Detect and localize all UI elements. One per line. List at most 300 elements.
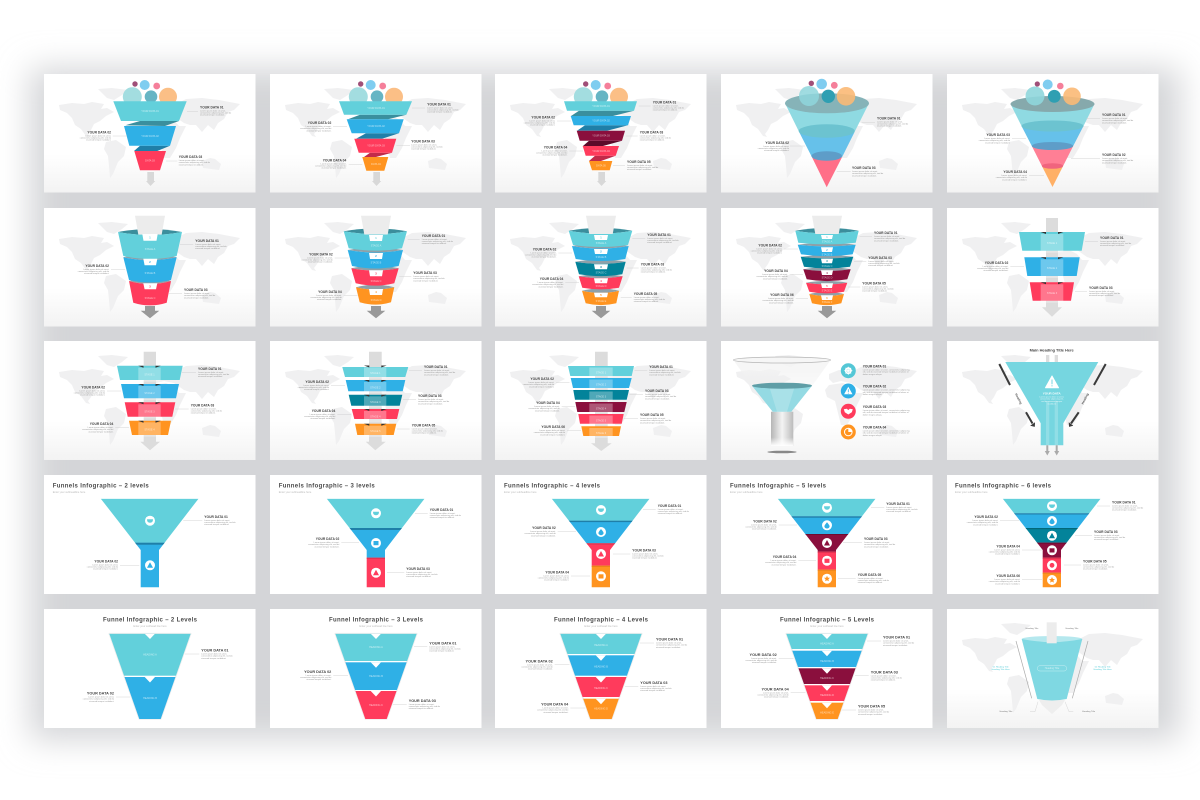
ribbon funnel xyxy=(339,101,412,171)
label 04: YOUR DATA 04 xyxy=(318,290,342,294)
funnel xyxy=(781,634,873,719)
label 04: YOUR DATA 04 xyxy=(323,158,346,162)
icon: drop xyxy=(1047,516,1057,526)
label 04: YOUR DATA 04 xyxy=(544,145,567,149)
label 03: eiusmod tempor incididunt. xyxy=(632,557,658,560)
label 01: eiusmod tempor incididunt. xyxy=(201,657,227,660)
label 06: eiusmod tempor incididunt. xyxy=(769,301,794,304)
label 05: consectetur adipiscing elit, sed do xyxy=(627,166,659,169)
cup funnel: Heading Title xyxy=(1045,667,1060,670)
label 04: consectetur adipiscing elit, sed do xyxy=(82,428,114,431)
funnel: HEADING A xyxy=(369,646,383,649)
label 04: eiusmod tempor incididunt. xyxy=(764,696,789,699)
funnel segments: STAGE 2 xyxy=(370,386,381,390)
label 04: Lorem ipsum dolor sit amet, xyxy=(542,149,568,152)
label 01: YOUR DATA 01 xyxy=(886,502,910,506)
label 03: consectetur adipiscing elit, sed do xyxy=(191,410,223,413)
stage bands xyxy=(795,216,859,305)
arrow xyxy=(367,306,385,318)
label 03: YOUR DATA 03 xyxy=(406,567,430,571)
label 01: YOUR DATA 01 xyxy=(649,365,673,369)
subtitle: Enter your subhead line here xyxy=(359,624,393,628)
funnel segments: STAGE 1 xyxy=(596,372,607,374)
stage bands: 2 xyxy=(375,254,377,258)
label 02: YOUR DATA 02 xyxy=(308,121,331,125)
icon: person xyxy=(371,568,381,578)
flow strips and output arrows xyxy=(1045,401,1059,456)
label 04: consectetur adipiscing elit, sed do xyxy=(765,561,797,564)
label 01: eiusmod tempor incididunt. xyxy=(1112,509,1137,512)
icon: gear xyxy=(841,363,856,378)
label 03: dolore magna aliqua. xyxy=(863,413,883,416)
teal note left: 01 Heading Title xyxy=(993,666,1009,668)
center text: Lorem ipsum dolor sit amet, xyxy=(1039,395,1064,398)
icon: mail xyxy=(371,538,381,548)
arrow xyxy=(372,172,381,186)
arrow xyxy=(592,306,610,318)
stage bands: 4 xyxy=(375,290,377,294)
funnel: HEADING B xyxy=(369,675,383,678)
label 01: eiusmod tempor incididunt. xyxy=(658,512,683,515)
label 03: YOUR DATA 03 xyxy=(871,670,898,674)
stage bands: 3 xyxy=(600,265,602,269)
label 01: YOUR DATA 01 xyxy=(201,649,228,653)
funnel xyxy=(1005,362,1098,445)
label 01: eiusmod tempor incididunt. xyxy=(883,644,908,647)
stage bands: STAGE E xyxy=(822,290,833,292)
label 03: YOUR DATA 03 xyxy=(413,271,437,275)
label 01: elit, sed do eiusmod tempor incididunt ut labore et xyxy=(863,371,909,374)
panel: slide 1 three level ribbon funnel xyxy=(44,74,256,192)
label 02: YOUR DATA 02 xyxy=(974,515,998,519)
label 02: YOUR DATA 02 xyxy=(758,243,782,247)
label 06: YOUR DATA 06 xyxy=(770,293,794,297)
label 01: Lorem ipsum dolor sit amet, xyxy=(201,653,227,656)
ribbon funnel: YOUR DATA 02 xyxy=(367,125,385,128)
label 01: consectetur adipiscing elit, sed do xyxy=(886,508,918,511)
label 02: Lorem ipsum dolor sit amet, xyxy=(303,384,329,387)
label 04: consectetur adipiscing elit, sed do xyxy=(315,165,347,168)
panel: slide 22 funnel 3 levels xyxy=(270,609,482,728)
label 05: eiusmod tempor incididunt. xyxy=(858,713,883,716)
funnel: HEADING D xyxy=(594,708,608,711)
label 03: Lorem ipsum dolor sit amet, xyxy=(1102,157,1128,160)
label 04: eiusmod tempor incididunt. xyxy=(543,711,569,714)
stage bands: 3 xyxy=(149,284,151,288)
label 02: eiusmod tempor incididunt. xyxy=(304,388,329,391)
stage bands: 1 xyxy=(600,236,602,240)
icon: pie chart xyxy=(841,424,856,440)
label 03: consectetur adipiscing elit, sed do xyxy=(1102,159,1134,162)
label 03: eiusmod tempor incididunt. xyxy=(409,707,434,710)
label 03: eiusmod tempor incididunt. xyxy=(1102,161,1127,164)
label 03: YOUR DATA 03 xyxy=(863,405,886,409)
label 04: Lorem ipsum dolor sit amet, xyxy=(1001,174,1027,177)
label 05: YOUR DATA 05 xyxy=(412,423,435,427)
arrow xyxy=(597,172,606,186)
icon: bowl xyxy=(1047,501,1057,511)
label 02: eiusmod tempor incididunt. xyxy=(529,385,554,388)
label 02: Lorem ipsum dolor sit amet, xyxy=(85,134,111,137)
label 04: YOUR DATA 04 xyxy=(762,687,789,691)
funnel: HEADING A xyxy=(820,643,834,646)
label 02: consectetur adipiscing elit, sed do xyxy=(78,270,110,273)
label 06: Lorem ipsum dolor sit amet, xyxy=(539,429,565,432)
funnel segments: STAGE 3 xyxy=(596,396,607,398)
label 03: consectetur adipiscing elit, sed do xyxy=(411,146,443,149)
label 02: Lorem ipsum dolor sit amet, xyxy=(751,523,777,526)
stage bands: 4 xyxy=(826,272,828,275)
panel: slide 6 three stage band funnel xyxy=(44,208,256,326)
left heading: Heading xyxy=(1014,393,1023,405)
label 02: YOUR DATA 02 xyxy=(305,380,329,384)
label 02: consectetur adipiscing elit, sed do xyxy=(301,259,334,262)
panel: slide 2 four level ribbon funnel xyxy=(270,74,482,192)
label 03: consectetur adipiscing elit, sed do xyxy=(640,687,672,690)
label 03: YOUR DATA 03 xyxy=(645,389,669,393)
heading top left: Heading Title xyxy=(1026,627,1039,630)
funnel segments: STAGE 5 xyxy=(370,430,381,433)
label 02: Lorem ipsum dolor sit amet, consectetur adipiscing xyxy=(863,389,910,392)
funnel xyxy=(555,634,647,719)
teal note left: Heading Title Here xyxy=(992,668,1011,671)
label 03: eiusmod tempor incididunt. xyxy=(179,163,204,166)
bubbles xyxy=(574,80,628,106)
label 02: YOUR DATA 02 xyxy=(753,519,777,523)
label 05: eiusmod tempor incididunt. xyxy=(1083,568,1108,571)
label 04: eiusmod tempor incididunt. xyxy=(317,298,342,301)
label 02: consectetur adipiscing elit, sed do xyxy=(298,386,330,389)
label 05: Lorem ipsum dolor sit amet, xyxy=(627,164,653,167)
label 03: Lorem ipsum dolor sit amet, xyxy=(411,143,437,146)
funnel xyxy=(330,634,422,719)
label 02: Lorem ipsum dolor sit amet, xyxy=(88,696,114,699)
subtitle: Enter your subhead line here xyxy=(810,624,844,628)
label 03: eiusmod tempor incididunt. xyxy=(411,148,437,151)
label 02: eiusmod tempor incididunt. xyxy=(973,523,998,526)
label 02: Lorem ipsum dolor sit amet, xyxy=(306,125,332,128)
funnel: HEADING C xyxy=(820,677,834,680)
label 02: eiusmod tempor incididunt. xyxy=(93,568,118,571)
icon: handshake xyxy=(841,404,856,419)
label 03: Lorem ipsum dolor sit amet, xyxy=(191,407,217,410)
funnel xyxy=(100,498,198,588)
panel: slide 14 glass funnel with icon list xyxy=(721,341,932,460)
label 03: Lorem ipsum dolor sit amet, xyxy=(852,170,878,173)
panel: slide 10 three level tube funnel xyxy=(947,208,1158,326)
label 02: Lorem ipsum dolor sit amet, xyxy=(756,247,782,250)
label 02: Lorem ipsum dolor sit amet, xyxy=(751,657,777,660)
label 01: YOUR DATA 01 xyxy=(653,100,676,104)
label 02: eiusmod tempor incididunt. xyxy=(306,129,332,132)
icon: flower xyxy=(1047,560,1057,570)
stage bands: 5 xyxy=(600,293,602,297)
label 01: consectetur adipiscing elit, sed do xyxy=(424,371,456,374)
label 03: eiusmod tempor incididunt. xyxy=(641,271,666,274)
arrow xyxy=(141,306,159,318)
panel: slide 23 funnel 4 levels xyxy=(495,609,706,728)
panel: slide 21 funnel 2 levels xyxy=(44,609,256,728)
funnel segments: STAGE 5 xyxy=(596,420,607,422)
label 02: eiusmod tempor incididunt. xyxy=(306,678,332,681)
label 06: Lorem ipsum dolor sit amet, xyxy=(994,578,1020,581)
label 03: YOUR DATA 03 xyxy=(864,537,888,541)
label 05: YOUR DATA 05 xyxy=(634,292,657,296)
label 01: consectetur adipiscing elit, sed do xyxy=(201,655,233,658)
label 01: consectetur adipiscing elit, sed do xyxy=(195,245,227,248)
label 01: eiusmod tempor incididunt. xyxy=(430,516,455,519)
panel: slide 4 translucent cone xyxy=(721,74,932,192)
label 01: YOUR DATA 01 xyxy=(883,636,910,640)
label 03: YOUR DATA 03 xyxy=(184,288,208,292)
label 01: consectetur adipiscing elit, sed do xyxy=(656,644,688,647)
label 03: consectetur adipiscing elit, sed do xyxy=(1089,292,1121,295)
label 02: YOUR DATA 02 xyxy=(304,670,331,674)
label 02: YOUR DATA 02 xyxy=(530,377,554,381)
label 01: consectetur adipiscing elit, sed do xyxy=(653,106,685,109)
subtitle: Enter your subheadline here xyxy=(955,490,988,494)
label 01: consectetur adipiscing elit, sed do xyxy=(658,510,690,513)
label 01: YOUR DATA 01 xyxy=(424,365,448,369)
label 01: eiusmod tempor incididunt. xyxy=(198,375,223,378)
label 01: YOUR DATA 01 xyxy=(1100,236,1124,240)
stage bands: STAGE C xyxy=(596,271,607,274)
label 01: YOUR DATA 01 xyxy=(429,641,456,645)
label 01: Lorem ipsum dolor sit amet, xyxy=(422,238,448,241)
label 04: elit, sed do eiusmod tempor incididunt ut labore et xyxy=(863,432,909,435)
label 03: YOUR DATA 03 xyxy=(418,394,442,398)
label 03: eiusmod tempor incididunt. xyxy=(871,679,896,682)
label 03: YOUR DATA 03 xyxy=(868,256,892,260)
label 05: consectetur adipiscing elit, sed do xyxy=(412,430,444,433)
label 02: consectetur adipiscing elit, sed do xyxy=(745,526,778,529)
title: Funnels Infographic – 4 levels xyxy=(504,484,601,490)
tube and arrow xyxy=(366,352,386,450)
icon: star xyxy=(1047,575,1057,585)
label 06: consectetur adipiscing elit, sed do xyxy=(762,299,795,302)
label 05: eiusmod tempor incididunt. xyxy=(862,290,888,293)
label 01: Lorem ipsum dolor sit amet, xyxy=(1112,504,1138,507)
label 01: eiusmod tempor incididunt. xyxy=(656,646,681,649)
side lines xyxy=(1016,641,1088,698)
funnel segments: STAGE 3 xyxy=(370,401,381,404)
stage bands: STAGE D xyxy=(822,276,833,280)
label 03: consectetur adipiscing elit, sed do xyxy=(645,395,677,398)
label 05: consectetur adipiscing elit, sed do xyxy=(862,288,894,291)
panel: slide 16 funnels 2 levels xyxy=(44,475,256,594)
label 03: consectetur adipiscing elit, sed do xyxy=(640,137,672,140)
label 01: YOUR DATA 01 xyxy=(1112,500,1136,504)
arrow xyxy=(146,172,155,186)
label 04: consectetur adipiscing elit, sed do xyxy=(304,415,336,418)
stage bands: STAGE F xyxy=(822,301,833,304)
label 04: eiusmod tempor incididunt. xyxy=(995,553,1020,556)
right pointer xyxy=(1069,364,1106,426)
label 03: eiusmod tempor incididunt. xyxy=(191,412,216,415)
label 02: Lorem ipsum dolor sit amet, xyxy=(531,251,557,254)
label 02: consectetur adipiscing elit, sed do xyxy=(745,659,778,662)
subtitle: Enter your subheadline here xyxy=(730,490,763,494)
label 02: consectetur adipiscing elit, sed do xyxy=(300,676,332,679)
label 02: eiusmod tempor incididunt. xyxy=(764,149,789,152)
label 01: eiusmod tempor incididunt. xyxy=(886,510,912,513)
label 05: YOUR DATA 05 xyxy=(858,573,881,577)
label 02: eiusmod tempor incididunt. xyxy=(752,528,777,531)
label 02: consectetur adipiscing elit, sed do xyxy=(80,137,112,140)
label 04: Lorem ipsum dolor sit amet, xyxy=(543,707,569,710)
label 01: eiusmod tempor incididunt. xyxy=(874,239,899,242)
label 02: eiusmod tempor incididunt. xyxy=(757,252,782,255)
subtitle: Enter your subheadline here xyxy=(279,490,312,494)
label 01: Lorem ipsum dolor sit amet, consectetur adipiscing xyxy=(863,368,910,371)
label 04: YOUR DATA 04 xyxy=(773,555,796,559)
label 02: YOUR DATA 02 xyxy=(531,115,555,119)
label 02: eiusmod tempor incididunt. xyxy=(308,261,333,264)
label 04: Lorem ipsum dolor sit amet, consectetur adipiscing xyxy=(863,429,910,432)
funnel: HEADING C xyxy=(594,687,608,690)
label 02: Lorem ipsum dolor sit amet, xyxy=(972,519,998,522)
label 03: consectetur adipiscing elit, sed do xyxy=(632,555,664,558)
funnel segments: STAGE 2 xyxy=(144,392,155,395)
label 03: consectetur adipiscing elit, sed do xyxy=(184,294,216,297)
stage bands: STAGE D xyxy=(371,299,382,302)
label 03: consectetur adipiscing elit, sed do xyxy=(641,269,673,272)
label 01: consectetur adipiscing elit, sed do xyxy=(877,123,909,126)
tube and arrow xyxy=(140,352,160,450)
funnel segments: STAGE 6 xyxy=(596,432,607,435)
label 04: Lorem ipsum dolor sit amet, xyxy=(538,281,564,284)
label 02: Lorem ipsum dolor sit amet, xyxy=(527,663,553,666)
ribbon funnel xyxy=(564,101,637,170)
label 06: YOUR DATA 06 xyxy=(541,425,565,429)
label 03: elit, sed do eiusmod tempor incididunt ut labore et xyxy=(863,411,909,414)
label 03: eiusmod tempor incididunt. xyxy=(413,279,439,282)
funnel: HEADING B xyxy=(143,697,157,700)
teal note right: 02 Heading Title xyxy=(1095,666,1111,668)
label 04: consectetur adipiscing elit, sed do xyxy=(310,296,343,299)
ribbon funnel: DATA 03 xyxy=(145,160,155,162)
label 02: consectetur adipiscing elit, sed do xyxy=(523,383,555,386)
cone xyxy=(1010,96,1094,187)
label 03: YOUR DATA 03 xyxy=(409,699,436,703)
stage bands: 1 xyxy=(375,236,377,240)
ribbon funnel: YOUR DATA 03 xyxy=(592,135,610,138)
label 04: dolore magna aliqua. xyxy=(863,434,883,437)
label 01: Lorem ipsum dolor sit amet, xyxy=(1100,240,1126,243)
center text: incididunt xyxy=(1047,402,1056,405)
label 03: Lorem ipsum dolor sit amet, xyxy=(868,260,894,263)
label 01: Lorem ipsum dolor sit amet, xyxy=(874,235,900,238)
icon: mail xyxy=(822,556,832,566)
label 01: YOUR DATA 01 xyxy=(427,102,451,106)
funnel segments: STAGE 3 xyxy=(1047,292,1058,295)
label 01: eiusmod tempor incididunt. xyxy=(1102,121,1127,124)
panel: slide 24 funnel 5 levels xyxy=(721,609,932,728)
label 02: YOUR DATA 02 xyxy=(526,659,553,663)
icon: star xyxy=(822,574,832,584)
label 01: consectetur adipiscing elit, sed do xyxy=(427,108,459,111)
label 02: YOUR DATA 02 xyxy=(309,252,333,256)
cone xyxy=(785,93,869,187)
panel: slide 12 five level tube funnel xyxy=(270,341,482,460)
stage bands: STAGE A xyxy=(822,240,833,244)
label 01: Lorem ipsum dolor sit amet, xyxy=(658,508,684,511)
stage bands: 1 xyxy=(826,236,828,239)
label 04: consectetur adipiscing elit, sed do xyxy=(536,152,568,155)
label 03: YOUR DATA 03 xyxy=(641,262,664,266)
label 01: Lorem ipsum dolor sit amet, xyxy=(430,512,456,515)
label 03: Lorem ipsum dolor sit amet, xyxy=(409,703,435,706)
label 02: consectetur adipiscing elit, sed do xyxy=(525,254,557,257)
ribbon funnel: YOUR DATA 01 xyxy=(592,105,610,108)
label 03: YOUR DATA 03 xyxy=(852,166,876,170)
stage bands: STAGE B xyxy=(145,272,156,275)
label 02: Lorem ipsum dolor sit amet, xyxy=(307,256,333,259)
panel: slide 19 funnels 5 levels xyxy=(721,475,932,594)
icon: mail xyxy=(596,571,606,581)
bubbles xyxy=(349,80,403,106)
ribbon funnel: YOUR DATA 01 xyxy=(367,107,385,110)
funnel segments: STAGE 1 xyxy=(370,372,381,375)
label 01: consectetur adipiscing elit, sed do xyxy=(647,239,679,242)
heading: Main Heading Title Here xyxy=(1030,348,1075,353)
label 02: elit, sed do eiusmod tempor incididunt ut labore et xyxy=(863,391,909,394)
label 02: YOUR DATA 02 xyxy=(750,653,777,657)
label 03: Lorem ipsum dolor sit amet, xyxy=(645,393,671,396)
label 01: Lorem ipsum dolor sit amet, xyxy=(886,506,912,509)
label 03: consectetur adipiscing elit, sed do xyxy=(868,262,900,265)
label 01: Lorem ipsum dolor sit amet, xyxy=(200,109,226,112)
funnel segments: STAGE 3 xyxy=(144,410,155,413)
title: Funnels Infographic – 3 levels xyxy=(279,484,375,490)
funnel: HEADING A xyxy=(143,654,157,656)
label 05: YOUR DATA 05 xyxy=(862,281,886,285)
label 01: YOUR DATA 01 xyxy=(656,638,683,642)
icon: warning xyxy=(841,384,856,398)
label 02: eiusmod tempor incididunt. xyxy=(531,256,557,259)
label 02: eiusmod tempor incididunt. xyxy=(531,534,556,537)
panel: slide 8 five stage band funnel xyxy=(495,208,706,326)
label 03: YOUR DATA 03 xyxy=(411,139,435,143)
label 02: consectetur adipiscing elit, sed do xyxy=(524,122,556,125)
label 05: consectetur adipiscing elit, sed do xyxy=(1083,566,1115,569)
label 02: Lorem ipsum dolor sit amet, xyxy=(314,541,340,544)
label 02: eiusmod tempor incididunt. xyxy=(86,139,111,142)
stage bands: 2 xyxy=(600,250,602,254)
label 01: YOUR DATA 01 xyxy=(863,364,886,368)
ribbon funnel: DATA 04 xyxy=(371,163,381,166)
right heading: Heading xyxy=(1081,393,1090,405)
label 05: eiusmod tempor incididunt. xyxy=(640,421,665,424)
label 04: YOUR DATA 04 xyxy=(1003,170,1027,174)
icon: bowl xyxy=(371,508,381,518)
icon: person xyxy=(822,538,832,548)
arrows in xyxy=(1046,355,1058,363)
stage bands: STAGE A xyxy=(145,248,156,251)
label 04: consectetur adipiscing elit, sed do xyxy=(989,551,1021,554)
label 04: Lorem ipsum dolor sit amet, xyxy=(762,273,788,276)
label 04: consectetur adipiscing elit, sed do xyxy=(528,407,561,410)
stage bands: 6 xyxy=(826,297,828,300)
heading bottom left: Heading Title xyxy=(1000,710,1013,713)
label 05: Lorem ipsum dolor sit amet, xyxy=(1083,563,1109,566)
label 02: Lorem ipsum dolor sit amet, xyxy=(83,268,109,271)
label 04: eiusmod tempor incididunt. xyxy=(535,409,560,412)
label 05: Lorem ipsum dolor sit amet, xyxy=(640,417,666,420)
label 02: YOUR DATA 02 xyxy=(532,526,556,530)
label 02: YOUR DATA 02 xyxy=(316,537,339,541)
label 01: eiusmod tempor incididunt. xyxy=(204,523,230,526)
